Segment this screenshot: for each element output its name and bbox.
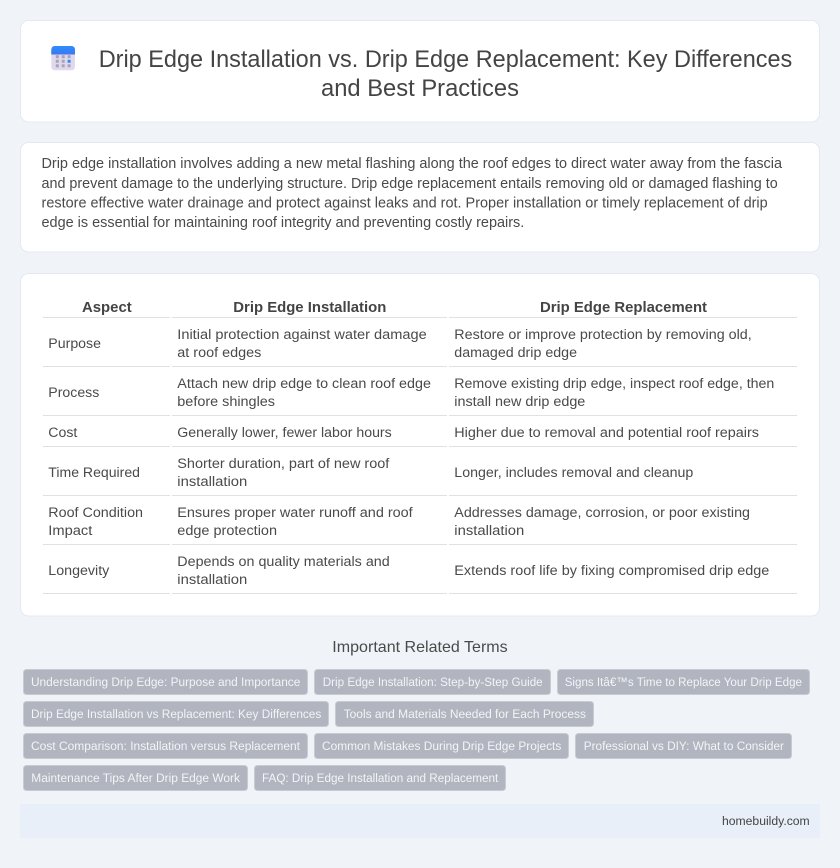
footer text: site name: homebuildy.com: [722, 814, 810, 828]
table row: roof condition impact: Impact: [48, 523, 92, 539]
text block: summary paragraph: and prevent damage to the underlying structure. Drip edge replacement entails removing old or damaged flashing to: [42, 176, 778, 192]
tag: key differences: [24, 702, 328, 726]
table row: cost: [43, 425, 797, 446]
table row: time required: installation: [177, 474, 247, 490]
tag: faq: [254, 766, 506, 790]
table row: longevity: Extends roof life by fixing compromised drip edge: [454, 563, 769, 579]
table row: time required: Shorter duration, part of new roof: [177, 456, 389, 472]
tag: cost comparison: Cost Comparison: Installation versus Replacement: [31, 739, 301, 753]
tag: maintenance tips: Maintenance Tips After Drip Edge Work: [31, 771, 241, 785]
table row: purpose: [43, 327, 797, 366]
text block: summary paragraph: [42, 156, 782, 231]
tag: step-by-step guide: Drip Edge Installation: Step-by-Step Guide: [323, 675, 543, 689]
table row: cost: Cost: [48, 425, 77, 441]
table header row: Drip Edge Installation: [233, 300, 386, 316]
tag: common mistakes: Common Mistakes During Drip Edge Projects: [322, 739, 561, 753]
tag: signs to replace: Signs Itâ€™s Time to Replace Your Drip Edge: [565, 675, 802, 689]
table row: roof condition impact: installation: [454, 523, 524, 539]
table row: process: Remove existing drip edge, inspect roof edge, then: [454, 376, 774, 392]
table row: process: [43, 376, 797, 416]
table row: purpose: Initial protection against water damage: [177, 327, 427, 343]
title: and Best Practices: [321, 75, 519, 102]
tag: step-by-step guide: [314, 670, 550, 694]
table row: roof condition impact: edge protection: [177, 523, 277, 539]
table row: time required: [43, 456, 797, 496]
table row: roof condition impact: Roof Condition: [48, 505, 143, 521]
panel: related term tags: [24, 670, 810, 790]
table row: purpose: Restore or improve protection by removing old,: [454, 327, 752, 343]
table header row: [43, 300, 797, 318]
table row: longevity: Longevity: [48, 563, 110, 579]
tag: maintenance tips: [24, 766, 248, 790]
table row: process: Process: [48, 385, 99, 401]
table row: longevity: installation: [177, 572, 247, 588]
tag: tools and materials: Tools and Materials Needed for Each Process: [344, 707, 586, 721]
table row: time required: Time Required: [48, 465, 140, 481]
tag: cost comparison: [24, 734, 308, 758]
tag: understanding drip edge: Understanding Drip Edge: Purpose and Importance: [31, 675, 301, 689]
table row: roof condition impact: [43, 505, 797, 544]
title: [99, 46, 792, 102]
tag: common mistakes: [314, 734, 568, 758]
panel: header: [20, 20, 820, 122]
tag: signs to replace: [558, 670, 810, 694]
tag: professional vs diy: Professional vs DIY: What to Consider: [584, 739, 784, 753]
table row: purpose: damaged drip edge: [454, 345, 577, 361]
table header row: Drip Edge Replacement: [540, 300, 707, 316]
text block: summary paragraph: edge is essential for maintaining roof integrity and preventing costly repairs.: [42, 215, 524, 231]
text block: summary paragraph: restore effective water drainage and protect against leaks and rot. Proper installation or timely replacement of drip: [42, 196, 768, 212]
tag: tools and materials: [336, 702, 594, 726]
text block: summary paragraph: Drip edge installation involves adding a new metal flashing along the roof edges to direct water away from the fascia: [42, 156, 782, 172]
footer: [20, 804, 820, 838]
table row: cost: Generally lower, fewer labor hours: [177, 425, 392, 441]
table header row: Aspect: [82, 300, 132, 316]
tag: professional vs diy: [576, 734, 792, 758]
tag: key differences: Drip Edge Installation vs Replacement: Key Differences: [31, 707, 321, 721]
table row: process: Attach new drip edge to clean roof edge: [177, 376, 431, 392]
table row: process: before shingles: [177, 394, 275, 410]
table row: cost: Higher due to removal and potential roof repairs: [454, 425, 759, 441]
table row: process: install new drip edge: [454, 394, 585, 410]
panel: comparison table: [20, 274, 820, 616]
table row: longevity: [43, 554, 797, 594]
title: Drip Edge Installation vs. Drip Edge Replacement: Key Differences: [99, 46, 792, 73]
tag: faq: FAQ: Drip Edge Installation and Replacement: [262, 771, 499, 785]
table row: purpose: at roof edges: [177, 345, 261, 361]
table row: roof condition impact: Ensures proper water runoff and roof: [177, 505, 413, 521]
panel: introduction: [20, 142, 820, 252]
table row: time required: Longer, includes removal and cleanup: [454, 465, 693, 481]
table row: roof condition impact: Addresses damage, corrosion, or poor existing: [454, 505, 750, 521]
icon: calendar: [51, 46, 75, 70]
heading: important related terms: Important Related Terms: [332, 639, 508, 656]
table row: purpose: Purpose: [48, 336, 101, 352]
table row: longevity: Depends on quality materials and: [177, 554, 390, 570]
tag: understanding drip edge: [24, 670, 308, 694]
